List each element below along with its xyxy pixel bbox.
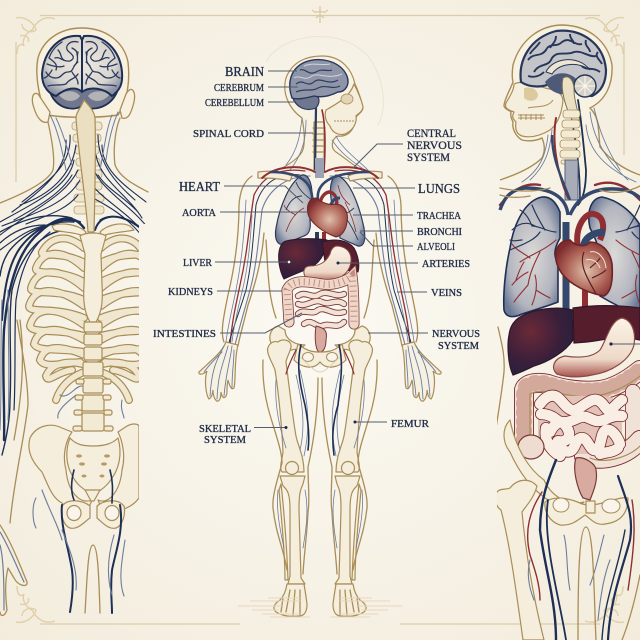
label: lungs bbox=[353, 182, 460, 197]
pelvis and femur bbox=[495, 420, 628, 640]
label: spinal cord bbox=[193, 128, 313, 140]
label: nervous system: NERVOUS bbox=[432, 329, 480, 340]
brain: posterior view bbox=[42, 36, 122, 109]
small intestine bbox=[298, 293, 344, 352]
head, neck and shoulders outline bbox=[500, 25, 640, 180]
label: spinal cord: SPINAL CORD bbox=[193, 128, 264, 140]
head and neck outline bbox=[262, 56, 378, 177]
sternum bbox=[80, 233, 106, 322]
heart, close-up bbox=[556, 240, 612, 296]
label: central nervous system: NERVOUS bbox=[407, 138, 462, 152]
label: skeletal system: SKELETAL bbox=[199, 424, 251, 435]
ground shadow under feet bbox=[238, 598, 402, 617]
label: arteries: ARTERIES bbox=[422, 259, 470, 270]
label: central nervous system bbox=[353, 126, 462, 168]
label: skeletal system bbox=[199, 424, 288, 446]
label: heart bbox=[179, 180, 303, 203]
aorta and pulmonary vessels bbox=[566, 214, 605, 320]
label: heart: HEART bbox=[179, 180, 220, 195]
panel: central full figure bbox=[199, 56, 441, 617]
label: liver bbox=[183, 258, 291, 269]
skull bbox=[505, 82, 563, 137]
brain: sagittal section bbox=[521, 31, 606, 97]
nerves: hip and thigh bbox=[33, 386, 125, 613]
corner ornament: top left bbox=[16, 18, 55, 54]
label: central nervous system: SYSTEM bbox=[407, 150, 450, 164]
corner ornament: top right bbox=[585, 18, 624, 54]
label: lungs: LUNGS bbox=[418, 182, 460, 197]
legs with femur, tibia and feet bbox=[263, 340, 377, 616]
brainstem and spinal cord bbox=[562, 77, 586, 205]
label: aorta bbox=[182, 208, 307, 219]
label: trachea: TRACHEA bbox=[417, 211, 462, 222]
cervical vertebrae bbox=[560, 110, 580, 164]
label: bronchi: BRONCHI bbox=[417, 227, 462, 238]
liver bbox=[279, 239, 327, 279]
label: central nervous system: CENTRAL bbox=[407, 126, 456, 140]
leader for stomach bbox=[609, 342, 640, 346]
label: brain: BRAIN bbox=[225, 64, 264, 79]
ribcage bbox=[29, 224, 156, 400]
trachea bbox=[565, 160, 578, 200]
panel: back view, nervous and skeletal system bbox=[0, 28, 156, 616]
label: femur bbox=[354, 419, 429, 430]
pelvis bbox=[29, 424, 139, 528]
label: intestines: INTESTINES bbox=[153, 329, 216, 340]
lungs bbox=[504, 197, 640, 317]
corner ornament: bottom right bbox=[585, 586, 624, 622]
label: nervous system: SYSTEM bbox=[438, 341, 480, 352]
label: liver: LIVER bbox=[183, 258, 212, 269]
label: alveoli bbox=[360, 232, 455, 253]
label: bronchi bbox=[360, 227, 462, 238]
heart bbox=[307, 198, 347, 237]
pelvis and hips bbox=[270, 326, 370, 367]
lungs bbox=[275, 175, 365, 246]
corner ornament: bottom left bbox=[16, 586, 55, 622]
label: aorta: AORTA bbox=[182, 208, 216, 219]
label: cerebrum bbox=[214, 83, 298, 94]
thigh gap and body contour bbox=[0, 320, 100, 616]
labels and leader lines bbox=[153, 64, 480, 446]
stomach, close-up bbox=[554, 318, 634, 377]
stomach bbox=[304, 246, 351, 283]
large intestine bbox=[287, 276, 354, 324]
nerves and vessels of the hip bbox=[528, 460, 634, 640]
brain: side view, central figure bbox=[290, 60, 348, 110]
arteries and veins of the neck and shoulder bbox=[500, 108, 640, 215]
arms and hands bbox=[199, 170, 441, 401]
great vessels bbox=[262, 167, 378, 244]
label: femur: FEMUR bbox=[391, 419, 429, 430]
label: cerebellum: CEREBELLUM bbox=[205, 98, 264, 109]
label: intestines bbox=[153, 313, 302, 340]
label: cerebrum: CEREBRUM bbox=[214, 83, 264, 94]
label: kidneys: KIDNEYS bbox=[168, 287, 213, 298]
label: skeletal system: SYSTEM bbox=[204, 435, 247, 446]
label: brain bbox=[225, 64, 297, 79]
clavicles bbox=[52, 224, 134, 236]
label: trachea bbox=[353, 211, 462, 222]
cervical vertebrae bbox=[72, 122, 104, 214]
skull bbox=[325, 84, 363, 135]
large intestine, close-up bbox=[524, 370, 640, 460]
cecum pouch bbox=[518, 435, 544, 459]
label: veins bbox=[397, 288, 462, 299]
lumbar spine bbox=[73, 322, 113, 431]
label: alveoli: ALVEOLI bbox=[417, 242, 455, 253]
spinal column and spinal cord bbox=[286, 108, 368, 178]
label: veins: VEINS bbox=[431, 288, 462, 299]
small intestine, close-up bbox=[538, 396, 622, 456]
panel: side view, organ close-up bbox=[490, 25, 640, 640]
label: kidneys bbox=[168, 287, 282, 298]
label: arteries bbox=[336, 259, 470, 270]
label: nervous system bbox=[368, 329, 480, 352]
thigh gap and body contour bbox=[490, 327, 640, 640]
liver, close-up bbox=[508, 308, 573, 375]
head and neck outline bbox=[0, 28, 148, 203]
spinal cord bbox=[76, 100, 95, 232]
nerves: lower bundle running along the arm bbox=[0, 216, 148, 455]
caduceus ornament bbox=[312, 6, 328, 23]
rectum bbox=[575, 458, 597, 500]
nerves: upper and shoulder fans bbox=[0, 112, 148, 236]
liver, right lobe bbox=[573, 306, 640, 343]
